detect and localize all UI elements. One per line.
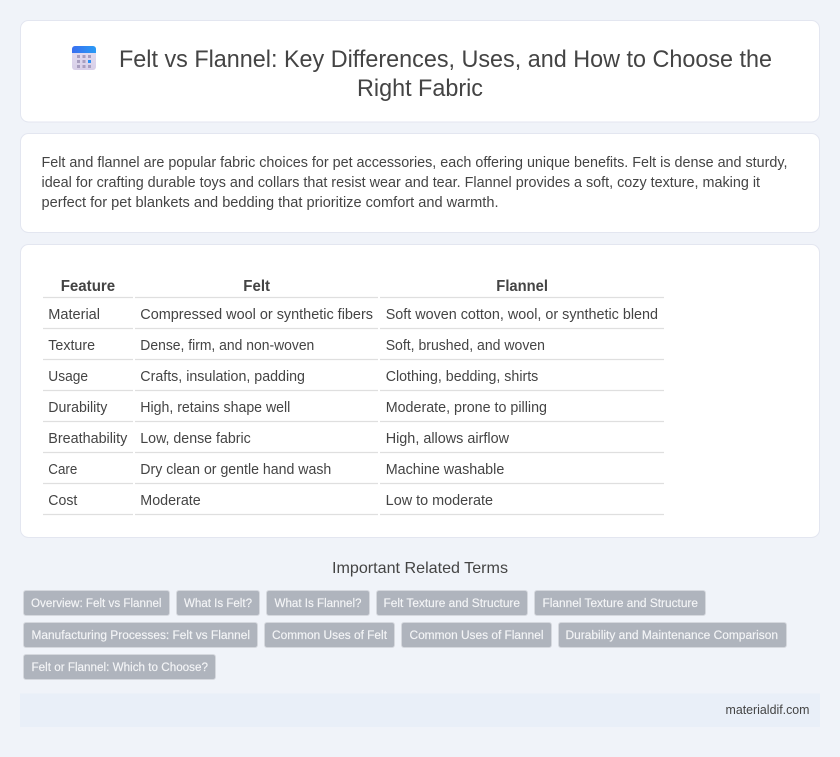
row: cost: Moderate <box>140 493 201 509</box>
tag: Durability and Maintenance Comparison <box>566 628 778 642</box>
row: care: Machine washable <box>386 462 504 478</box>
row: care: Dry clean or gentle hand wash <box>140 462 331 478</box>
table header row <box>61 278 548 295</box>
tag: What Is Felt? <box>184 596 252 610</box>
row: material: Compressed wool or synthetic fibers <box>140 307 373 323</box>
table header row: Felt <box>243 278 270 295</box>
footer bar <box>20 694 820 727</box>
table header row: Feature <box>61 278 116 295</box>
tag <box>264 622 394 648</box>
tag <box>24 654 216 680</box>
row: care: Care <box>48 462 77 478</box>
tag: Overview: Felt vs Flannel <box>31 596 162 610</box>
heading: important related terms: Important Related Terms <box>332 560 508 577</box>
row: cost: Cost <box>48 493 77 509</box>
row: breathability <box>48 431 510 447</box>
row: texture <box>48 338 545 354</box>
footer source text: materialdif.com <box>726 703 810 717</box>
row: breathability: High, allows airflow <box>386 431 510 447</box>
row: breathability: Breathability <box>48 431 128 447</box>
title: Right Fabric <box>357 75 483 102</box>
title: Felt vs Flannel: Key Differences, Uses, and How to Choose the <box>119 46 772 73</box>
row: material: Material <box>48 307 100 323</box>
tag: Common Uses of Felt <box>272 628 388 642</box>
row: durability: Moderate, prone to pilling <box>386 400 547 416</box>
tag: Felt or Flannel: Which to Choose? <box>32 660 208 674</box>
panel: title header <box>20 20 820 122</box>
row: cost: Low to moderate <box>386 493 493 509</box>
tag: Flannel Texture and Structure <box>542 596 698 610</box>
icon: calendar <box>72 46 96 70</box>
row: durability <box>48 400 547 416</box>
row: breathability: Low, dense fabric <box>140 431 251 447</box>
tag <box>266 590 370 616</box>
title <box>119 46 772 102</box>
tag <box>376 590 528 616</box>
row: durability: Durability <box>48 400 108 416</box>
tag <box>402 622 552 648</box>
tag <box>534 590 706 616</box>
row: durability: High, retains shape well <box>140 400 290 416</box>
row: material: Soft woven cotton, wool, or synthetic blend <box>386 307 658 323</box>
row: usage: Clothing, bedding, shirts <box>386 369 538 385</box>
tag <box>558 622 786 648</box>
row: usage: Usage <box>48 369 88 385</box>
row: texture: Soft, brushed, and woven <box>386 338 545 354</box>
row: texture: Texture <box>48 338 95 354</box>
tag: Felt Texture and Structure <box>384 596 520 610</box>
tag: Manufacturing Processes: Felt vs Flannel <box>32 628 250 642</box>
row: texture: Dense, firm, and non-woven <box>140 338 314 354</box>
tag <box>176 590 260 616</box>
table header row: Flannel <box>496 278 548 295</box>
tag <box>24 590 170 616</box>
tags: related terms <box>24 590 786 680</box>
tag <box>24 622 258 648</box>
row: care <box>48 462 504 478</box>
row: cost <box>48 493 493 509</box>
intro text: ideal for crafting durable toys and collars that resist wear and tear. Flannel provides a soft, cozy texture, making it <box>42 175 760 191</box>
intro text: Felt and flannel are popular fabric choices for pet accessories, each offering unique benefits. Felt is dense and sturdy, <box>42 155 788 171</box>
panel: comparison table <box>20 244 820 538</box>
intro text <box>42 155 788 211</box>
row: usage: Crafts, insulation, padding <box>140 369 305 385</box>
tag: Common Uses of Flannel <box>410 628 544 642</box>
row: usage <box>48 369 538 385</box>
intro text: perfect for pet blankets and bedding that prioritize comfort and warmth. <box>42 195 498 211</box>
row: material <box>48 307 658 323</box>
panel: intro paragraph <box>20 134 820 232</box>
tag: What Is Flannel? <box>274 596 362 610</box>
